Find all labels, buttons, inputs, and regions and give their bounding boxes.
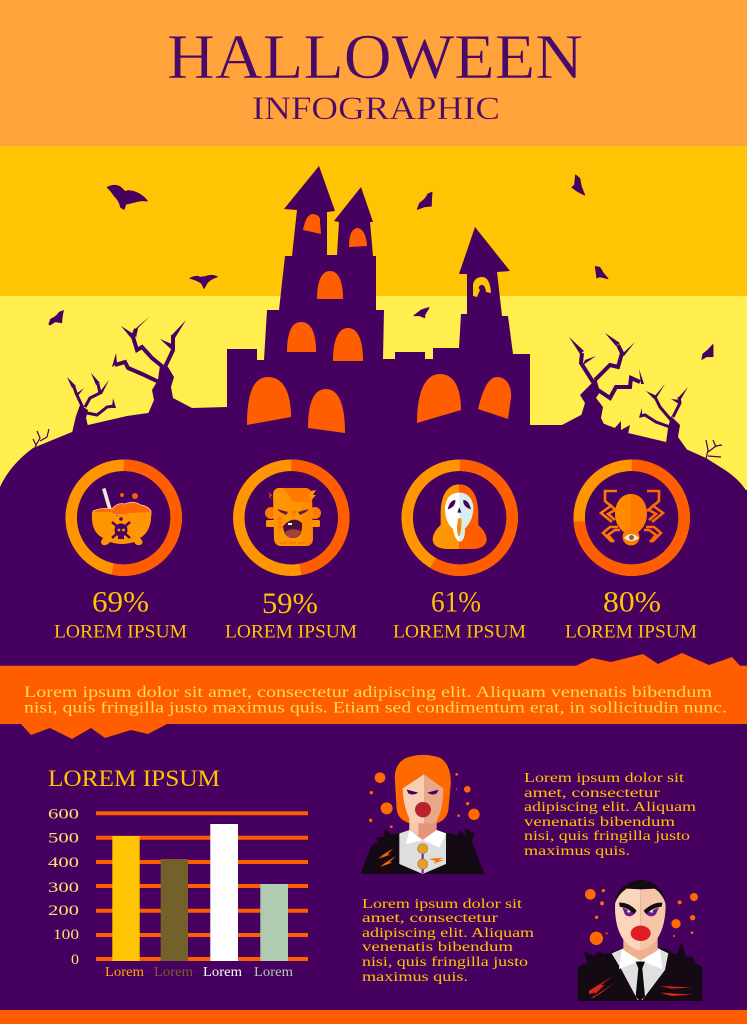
y axis labels: 300 bbox=[48, 880, 79, 896]
title: HALLOWEEN bbox=[167, 21, 583, 92]
icon: cauldron bbox=[92, 488, 151, 545]
y axis labels: 200 bbox=[48, 903, 79, 919]
stat ring: ghostface 61% bbox=[407, 465, 512, 570]
orange dots bbox=[369, 772, 480, 828]
y axis labels bbox=[48, 806, 79, 968]
character text: left paragraph: nisi, quis fringilla justo bbox=[362, 954, 528, 969]
bar chart bbox=[48, 806, 308, 979]
stat ring: cauldron 69% bbox=[71, 465, 176, 570]
character text: left paragraph: maximus quis. bbox=[362, 969, 468, 984]
bottom orange stripe bbox=[0, 1010, 747, 1024]
grid lines bbox=[96, 813, 308, 959]
dead trees right bbox=[569, 333, 722, 459]
stat label 1: LOREM IPSUM bbox=[54, 622, 187, 642]
stat label 2: LOREM IPSUM bbox=[225, 622, 357, 642]
character text: right paragraph: adipiscing elit. Aliquam bbox=[524, 799, 696, 814]
sky upper band bbox=[0, 146, 747, 296]
banner text bbox=[24, 684, 727, 716]
x axis labels: Lorem bbox=[154, 964, 194, 979]
y axis labels: 0 bbox=[71, 952, 79, 968]
header background bbox=[0, 0, 747, 146]
character text: left paragraph: adipiscing elit. Aliquam bbox=[362, 925, 534, 940]
haunted castle and hill bbox=[0, 166, 747, 520]
character text: left paragraph: Lorem ipsum dolor sit bbox=[362, 896, 522, 911]
character text: right paragraph bbox=[524, 770, 696, 858]
bats bbox=[49, 175, 713, 359]
character text: left paragraph: venenatis bibendum bbox=[362, 939, 513, 954]
tower window bbox=[473, 277, 491, 297]
banner text: Lorem ipsum dolor sit amet, consectetur adipiscing elit. Aliquam venenatis bibendum bbox=[24, 684, 712, 701]
y axis labels: 400 bbox=[48, 855, 79, 871]
character text: right paragraph: nisi, quis fringilla justo bbox=[524, 828, 690, 843]
sky lower band bbox=[0, 296, 747, 506]
y axis labels: 600 bbox=[48, 806, 79, 822]
y axis labels: 500 bbox=[48, 830, 79, 846]
chart heading: LOREM IPSUM bbox=[48, 766, 220, 791]
orange torn banner bbox=[0, 653, 747, 739]
icon: spider bbox=[601, 491, 663, 546]
y axis labels: 100 bbox=[53, 927, 79, 943]
character text: right paragraph: venenatis bibendum bbox=[524, 814, 675, 829]
character text: left paragraph bbox=[362, 896, 534, 984]
stat value 69%: 69% bbox=[92, 586, 149, 618]
banner text: nisi, quis fringilla justo maximus quis. Etiam sed condimentum erat, in sollicitudin nunc. bbox=[24, 700, 727, 716]
x axis labels: Lorem bbox=[254, 964, 294, 979]
subtitle: INFOGRAPHIC bbox=[252, 91, 500, 127]
character: vampire woman bbox=[361, 755, 484, 874]
x axis labels: Lorem bbox=[203, 964, 243, 979]
stat label 4: LOREM IPSUM bbox=[565, 622, 697, 642]
stat value 80%: 80% bbox=[603, 586, 661, 618]
icon: ghostface bbox=[433, 484, 487, 549]
character text: right paragraph: Lorem ipsum dolor sit bbox=[524, 770, 684, 785]
dead trees left bbox=[33, 316, 192, 447]
purple lower background bbox=[0, 490, 747, 1024]
character text: left paragraph: amet, consectetur bbox=[362, 910, 499, 925]
stat ring: spider 80% bbox=[579, 465, 684, 570]
character text: right paragraph: maximus quis. bbox=[524, 843, 630, 858]
stat value 61%: 61% bbox=[431, 586, 481, 618]
x axis labels bbox=[105, 964, 294, 979]
hill and castle silhouette bbox=[0, 166, 747, 520]
orange dots bbox=[585, 889, 698, 945]
character: vampire man bbox=[578, 879, 702, 1001]
character text: right paragraph: amet, consectetur bbox=[524, 785, 661, 800]
stat value 59%: 59% bbox=[262, 587, 318, 620]
stat label 3: LOREM IPSUM bbox=[393, 622, 526, 642]
stat ring: frankenstein 59% bbox=[239, 465, 344, 570]
x axis labels: Lorem bbox=[105, 964, 145, 979]
castle windows bbox=[247, 214, 511, 433]
bars bbox=[112, 824, 288, 961]
icon: frankenstein bbox=[265, 488, 321, 546]
